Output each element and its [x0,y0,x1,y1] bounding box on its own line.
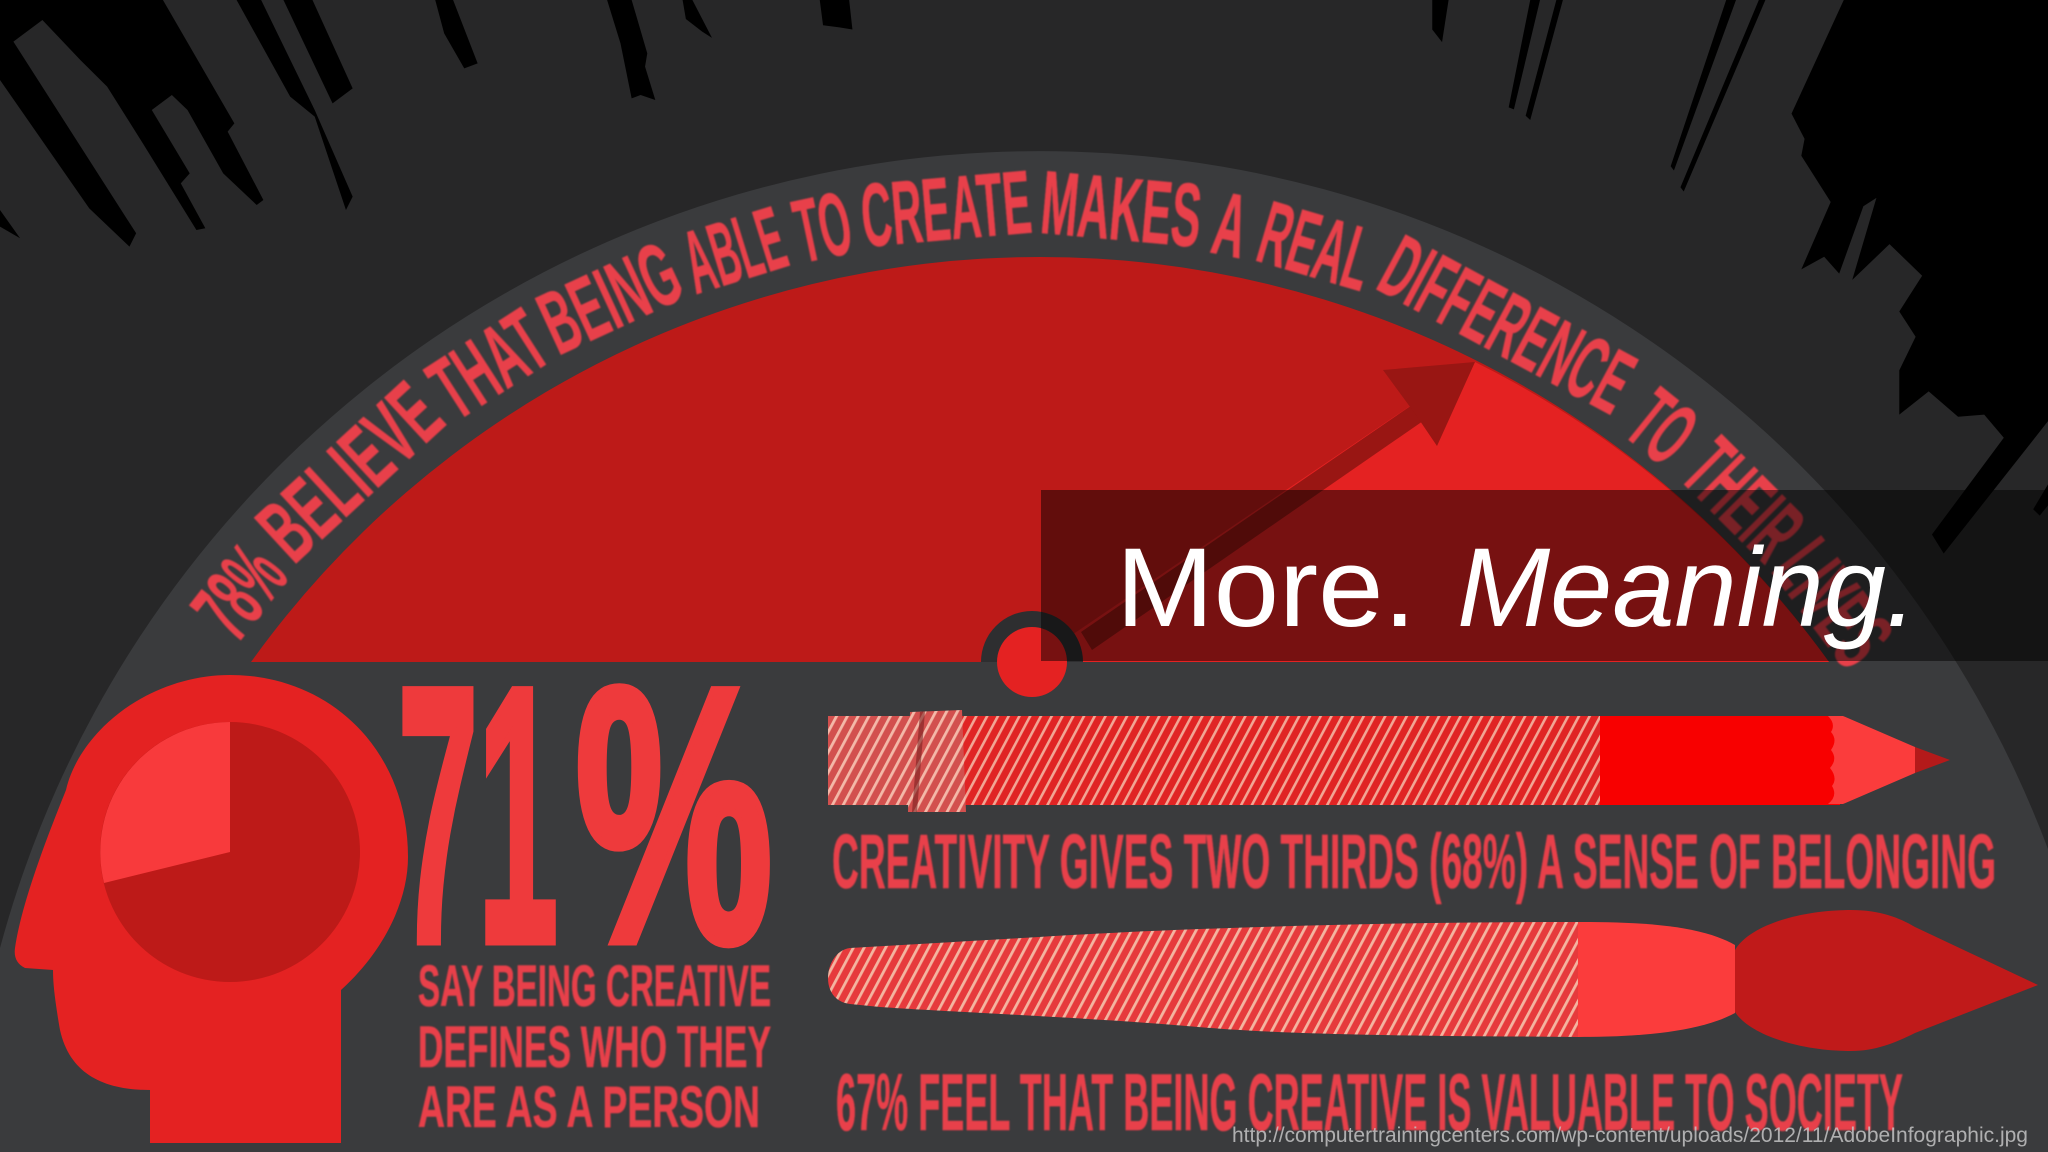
arrow needle [1081,362,1475,650]
curved headline around dial [174,153,1911,685]
curved headline around dial: THEIR [1663,421,1822,580]
dial hub [981,611,1083,697]
title: More. Meaning. [1116,525,1917,650]
icon: pencil bar 68% [828,710,1950,812]
curved headline around dial: A [1205,174,1256,278]
skyline silhouette: left detail [0,0,655,247]
gauge: bright red wedge 78% [1032,362,1829,662]
pencil solid section [1600,716,1840,805]
big stat 71%: 71 [398,612,558,1019]
curved headline around dial: TO [1609,371,1715,484]
stat caption: DEFINES WHO THEY [418,1015,771,1080]
stat caption: SAY BEING CREATIVE [418,954,771,1019]
curved headline around dial: BEING [525,223,696,374]
pie chart: dark portion 71% [100,722,360,982]
curved headline around dial: THAT [412,291,566,439]
curved headline around dial: BELIEVE [239,364,462,580]
curved headline around dial: 78% [174,527,306,657]
skyline silhouette: centre-left [683,0,852,38]
icon: head silhouette [15,675,408,1143]
stat caption: ARE AS A PERSON [418,1075,760,1140]
pie chart: light portion [100,722,230,883]
skyline silhouette: right [1432,0,2048,553]
pencil sharpened tip [1828,716,1915,804]
pencil eraser [828,716,910,805]
curved headline around dial: REAL [1248,183,1384,311]
brush bristles [1735,910,2038,1051]
source url: http://computertrainingcenters.com/wp-content/uploads/2012/11/AdobeInfographic.jpg [1232,1124,2028,1147]
brush ferrule [1578,922,1735,1037]
curved headline around dial: DIFFERENCE [1364,217,1650,433]
title: More. Meaning.: More. [1116,525,1416,650]
title: More. Meaning.: Meaning. [1457,525,1917,650]
curved headline around dial: ABLE [672,188,797,313]
curved headline around dial: TO [786,173,860,283]
ferrule dark line [912,711,925,812]
gauge sector [251,257,1829,697]
curved headline around dial: MAKES [1037,153,1205,267]
title banner overlay [1041,490,2048,661]
pencil body hatched [960,716,1600,805]
stat caption [418,954,771,1140]
brush handle hatched [828,922,1578,1037]
panel: head with 71% pie [15,675,408,1143]
gauge: dark red sector [251,257,1829,662]
big stat 71%: % [575,612,773,1019]
icon: paintbrush bar 67% [828,910,2038,1051]
pencil ferrule [908,710,966,812]
curved headline around dial: LIVES [1754,522,1911,685]
curved headline around dial: CREATE [857,153,1035,267]
pencil lead [1915,747,1950,773]
